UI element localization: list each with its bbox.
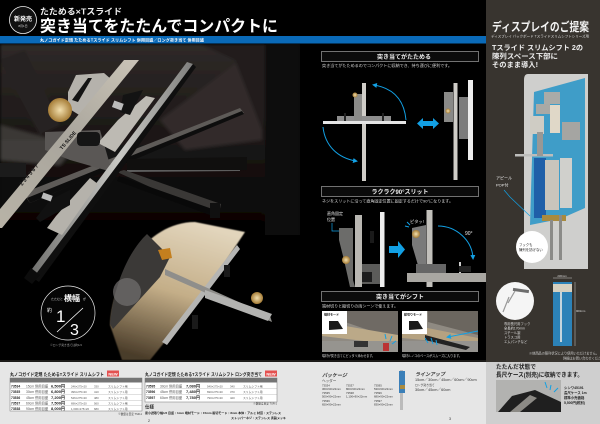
caption left: 端材が突き当てにピッタリ添わせます。 — [322, 353, 375, 358]
table 2: 60cm 併用目盛 — [160, 395, 183, 400]
table 1 — [10, 378, 142, 411]
note — [529, 350, 600, 360]
case photo — [496, 380, 561, 412]
brass knob — [48, 98, 72, 122]
package sizes: ヘッダー — [322, 378, 337, 383]
hook detail circle — [496, 282, 534, 320]
table 1: 546×275×20 — [71, 396, 87, 400]
table 2: 73597 — [146, 396, 155, 400]
table 1: 1,000×275×20 — [71, 407, 89, 411]
table 1: 7,200円 — [51, 395, 65, 400]
package sizes: 73596 — [374, 391, 382, 395]
folded ruler: TS SLIDE — [59, 130, 78, 151]
heading box — [322, 292, 478, 302]
case note: シンワ45191 — [564, 385, 584, 390]
table 1: 696×275×20 — [71, 402, 87, 406]
table 1: 73537 — [11, 402, 20, 406]
diagram: unfolded — [323, 83, 406, 181]
table 2: 45cm 併用目盛 — [160, 389, 183, 394]
diagram: after — [407, 210, 486, 287]
callout: width one third: 約 — [47, 307, 52, 314]
case note: 5,500円(税別) — [564, 400, 585, 405]
package sizes: 680×90×22mm — [374, 394, 393, 398]
note: ※他商品の陳列状況により使用いただけません。 — [529, 350, 599, 356]
panel: stop shift — [322, 292, 478, 358]
table 1: 7,500円 — [51, 400, 65, 406]
table 1: 73538 — [11, 407, 20, 411]
table 1: 480 — [94, 396, 99, 400]
case note: 長尺ケース 1m — [564, 390, 587, 395]
table 1: 45cm 併用目盛 — [26, 395, 49, 400]
callout bubble: フックも — [519, 242, 533, 247]
package sizes: 650×90×22mm — [322, 402, 341, 406]
table 1: スリムシフト用 — [108, 384, 128, 388]
table 2: 30cm 併用目盛 — [160, 383, 183, 388]
hook description: スチール製 — [504, 330, 521, 335]
panel: long case storage — [486, 362, 600, 424]
heading box: 突き当てがシフト — [376, 293, 424, 301]
table 1: 246×275×20 — [71, 384, 87, 388]
blue band — [0, 36, 486, 44]
black clamp knob — [77, 132, 100, 146]
title: 突き当てをたたんでコンパクトに — [40, 18, 278, 36]
table 1: スリムシフト用 — [108, 407, 128, 411]
package illustration — [553, 274, 586, 346]
table 2: 73596 — [146, 390, 155, 394]
lineup: 15cm／30cm／45cm／60cm／90cm — [415, 377, 477, 382]
subtitle: たためる×Tスライド — [40, 6, 122, 16]
hook description: 専用長尺用フック — [504, 321, 530, 326]
panel: bottom spec strip — [0, 360, 486, 424]
package sizes — [322, 372, 393, 406]
heading box — [322, 186, 478, 196]
package sizes: 500×90×22mm — [322, 394, 341, 398]
caption right: 端材ルノコのベースがスムーズに入ります。 — [402, 353, 462, 358]
package sizes: 360×90×22mm — [322, 387, 341, 391]
new release badge: 新発売 — [14, 15, 32, 23]
table 2: 7,780円 — [186, 395, 200, 400]
callout: width one third: たたむと — [51, 296, 63, 301]
package sizes: 830×90×22mm — [374, 402, 393, 406]
table 2: 7,080円 — [186, 383, 200, 388]
table 2: スリムシフト用 — [243, 396, 263, 400]
label: right-angle position: 位置 — [327, 216, 335, 222]
package sizes: 1,100×90×22mm — [346, 394, 368, 398]
package sizes: 73535 — [322, 391, 330, 395]
lineup: 30cm／45cm／60cm — [415, 387, 450, 392]
callout: width one third: 3 — [70, 322, 79, 339]
package sizes: 73537 — [346, 384, 354, 388]
table 1: スリムシフト用 — [108, 402, 128, 406]
table 1: 330 — [94, 384, 99, 388]
specification: 仕様 — [145, 404, 154, 410]
lead text: 陳列スペース下部に — [492, 52, 558, 60]
label: appeal POP: POP付 — [496, 182, 508, 188]
icon: click marks — [405, 222, 410, 227]
specification: ストッパーネジ：ステンレス 真鍮メッキ — [231, 415, 286, 420]
folded ruler: 2 3 4 5 6 7 — [19, 164, 40, 187]
lead text — [492, 44, 583, 69]
table 1: 6,800円 — [51, 389, 65, 394]
hook description: 全長約170mm — [504, 326, 525, 330]
heading box: 突き当てがたためる — [377, 53, 431, 61]
table 1 title: 丸ノコガイド定規 たためるTスライド スリムシフト — [10, 371, 104, 378]
arrow: step — [389, 241, 405, 258]
label: 90 degrees: 90° — [465, 231, 473, 237]
label: appeal POP — [496, 176, 530, 216]
photo: scrap cutting: 端材モード — [324, 312, 339, 316]
callout: width one third: 1 — [56, 307, 65, 326]
package sizes: パッケージ — [322, 372, 348, 379]
callout: width one third — [41, 286, 95, 340]
hook description: エムパンチなど — [504, 339, 528, 344]
storage heading: たたんだ状態で — [496, 363, 536, 371]
lead text: そのまま導入! — [492, 60, 538, 69]
panel: display proposal — [486, 0, 600, 362]
lead text: Tスライド スリムシフト 2の — [492, 44, 583, 52]
label: right-angle position: 直角固定 — [327, 210, 343, 216]
callout: width one third: が — [83, 296, 86, 301]
package sizes: 530×90×22mm — [374, 387, 393, 391]
table 2: 73595 — [146, 384, 155, 388]
lineup — [415, 371, 477, 392]
new release badge: 8月1日 — [18, 24, 28, 28]
package sizes: 73597 — [374, 399, 382, 403]
table 1: 30cm 併用目盛 — [26, 389, 49, 394]
table 1: 73534 — [11, 384, 20, 388]
callout bubble — [516, 231, 548, 263]
lineup: ロング突き当て — [415, 383, 435, 387]
table 2 title — [145, 370, 277, 378]
table 1: 73535 — [11, 390, 20, 394]
table 1: 73536 — [11, 396, 20, 400]
package sizes: 800×90×22mm — [346, 387, 365, 391]
photo: rip cutting — [402, 311, 478, 352]
table 1: スリムシフト用 — [108, 390, 128, 394]
diagram: folded — [444, 80, 473, 180]
package sizes: 73536 — [322, 399, 330, 403]
table 2: 790×275×20 — [207, 396, 223, 400]
in-use photo on the saw — [110, 222, 272, 360]
case note — [564, 385, 587, 405]
package thumbnail — [399, 370, 405, 410]
table 1: 410 — [94, 390, 99, 394]
table 1 title: NEW — [108, 371, 118, 376]
specification: 最小読取り幅1/2 目盛：1mm 端材モード：15mm 縦切モード：8mm 本体：アルミ 材質：ステンレス — [145, 410, 281, 415]
callout bubble: 陳列を妨げない — [519, 247, 543, 252]
label: click: ピタッ! — [410, 218, 424, 225]
package illustration: 900mm — [576, 309, 586, 313]
folded ruler — [0, 60, 139, 228]
arrow: double — [417, 118, 439, 129]
table 1: 60cm 併用目盛 — [26, 400, 49, 406]
table 1: 396×275×20 — [71, 390, 87, 394]
table 1: 15cm 併用目盛 — [26, 383, 49, 388]
table 2 title: 丸ノコガイド定規 たためるTスライド スリムシフト ロング突き当て — [145, 371, 262, 378]
page number left: 2 — [148, 418, 151, 423]
table 2 title: NEW — [266, 371, 276, 376]
package sizes: 73595 — [374, 384, 382, 388]
photo: scrap cutting — [322, 311, 398, 352]
display board — [515, 74, 588, 269]
arrow: rotation arc — [438, 226, 473, 258]
table 2 — [145, 378, 277, 402]
panel: 90 degree slit — [322, 186, 486, 287]
table 1: 8,000円 — [51, 406, 65, 411]
table 1: 90cm 併用目盛 — [26, 406, 49, 411]
photo: rip cutting: 縦切りモード — [404, 312, 422, 316]
package sizes: 73534 — [322, 384, 330, 388]
callout: width one third: 横幅 — [64, 293, 80, 303]
table 1 title — [10, 370, 119, 378]
diagram: before — [339, 212, 384, 287]
table 1: 680 — [94, 407, 99, 411]
table 2: 540×275×20 — [207, 384, 223, 388]
table 1: 6,500円 — [51, 383, 65, 388]
saw table backdrop — [0, 44, 300, 235]
header — [0, 6, 486, 44]
storage heading line 2: 長尺ケース(別売)に収納できます。 — [496, 371, 583, 379]
guide plate — [45, 130, 112, 172]
display subheading: ディスプレイ バックボード Tスライドスリムシフトシリーズ用 — [491, 34, 589, 38]
heading box — [322, 52, 478, 62]
table 2: 420 — [230, 396, 235, 400]
label: appeal POP: アピール — [496, 176, 512, 180]
table 2: 7,480円 — [186, 389, 200, 394]
table 2 note: ※数量は目安 TSR-1 — [253, 402, 278, 406]
description: ネジをスリットに沿って直角固定位置に固定するだけで90°になります。 — [322, 198, 453, 204]
label: right-angle position — [327, 210, 343, 231]
package illustration: 230mm — [557, 274, 567, 278]
hook plate — [68, 73, 110, 114]
band text: 丸ノコガイド定規 たためるTスライド スリムシフト 併用目盛／ロング突き当て 併用目盛 — [40, 37, 205, 44]
hero photo: folded T-slide guide — [0, 44, 300, 360]
description: 突き当てがたためるのでコンパクトに収納でき、持ち運びに便利です。 — [322, 63, 452, 68]
description: 端材切りと縦切りの両シーンで使えます。 — [322, 304, 398, 308]
arrow: lower fold arc — [323, 127, 356, 161]
case note: 標準小売価格 — [564, 395, 585, 400]
footnote under callout: ※ロング突き当ては約1/4 — [50, 343, 82, 347]
package sizes: 73538 — [346, 391, 354, 395]
table 1 note: ※数量は目安 TSR-1 — [118, 412, 143, 416]
table 2: 370 — [230, 390, 235, 394]
heading box: ラクラク90°スリット — [371, 188, 429, 196]
hook description: トラスコ用 — [504, 334, 520, 340]
table 2: 340 — [230, 384, 235, 388]
new release badge — [10, 6, 36, 34]
panel: folding stop — [322, 52, 478, 181]
table 2: スリムシフト用 — [243, 390, 263, 394]
arrow: upper fold arc — [374, 85, 406, 120]
table 1: 560 — [94, 402, 99, 406]
hook description — [504, 321, 530, 344]
table 2: 690×275×20 — [207, 390, 223, 394]
page number right: 3 — [449, 416, 452, 421]
specification — [145, 404, 286, 420]
table 1: スリムシフト用 — [108, 396, 128, 400]
lineup: ラインアップ — [415, 371, 446, 378]
black cross bars — [0, 108, 247, 218]
table 2: スリムシフト用 — [243, 384, 263, 388]
long silver fence bar — [24, 62, 196, 284]
